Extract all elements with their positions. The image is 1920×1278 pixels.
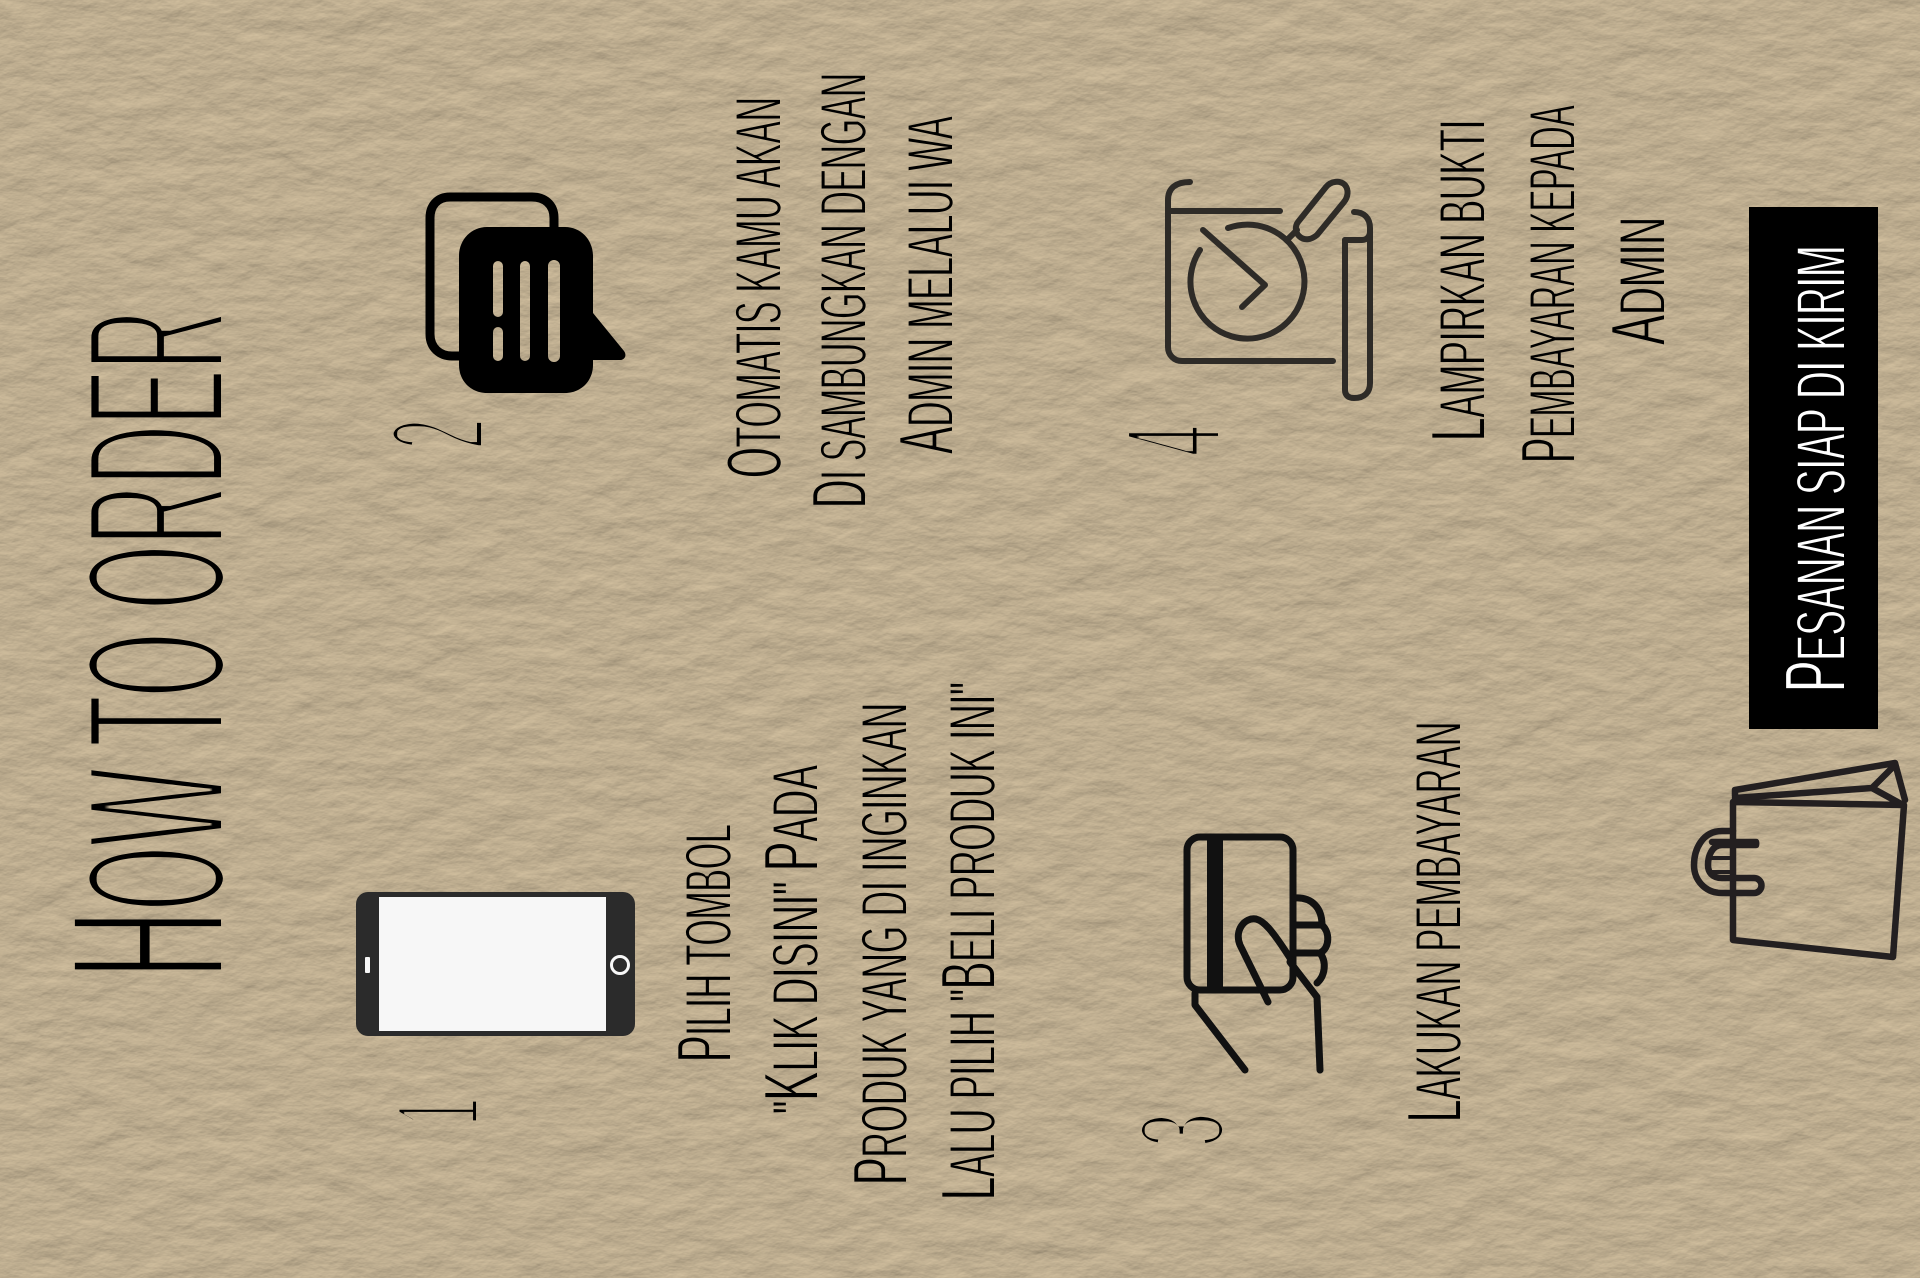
step 1 text	[660, 682, 1012, 1200]
step 2 text: ADMIN MELALUI WA	[882, 116, 970, 454]
step 4 text	[1414, 105, 1682, 463]
panel: step 4	[1097, 105, 1682, 463]
step 3 text: LAKUKAN PEMBAYARAN	[1390, 722, 1478, 1122]
step 1 text: PRODUK YANG DI INGINKAN	[836, 703, 924, 1185]
icon: chat bubbles	[430, 197, 625, 393]
step 2 text	[710, 73, 970, 508]
icon: smartphone	[356, 892, 635, 1036]
step 2 text: OTOMATIS KAMU AKAN	[710, 97, 798, 478]
panel: step 3	[1114, 722, 1478, 1147]
panel: order ready callout	[1694, 207, 1905, 957]
step number 4: 4	[1097, 425, 1251, 456]
step 1 text: LALU PILIH "BELI PRODUK INI"	[924, 682, 1012, 1200]
step 1 text: PILIH TOMBOL	[660, 824, 748, 1062]
step number 1: 1	[371, 1098, 505, 1125]
step number 2: 2	[364, 419, 513, 449]
icon: shopping bag	[1694, 763, 1905, 957]
callout box	[1749, 207, 1878, 729]
step 1 text: "KLIK DISINI" PADA	[747, 765, 835, 1114]
step 2 text: DI SAMBUNGKAN DENGAN	[795, 73, 883, 508]
step number 3: 3	[1114, 1113, 1250, 1147]
icon: payment proof document	[1168, 182, 1370, 398]
panel: step 2	[364, 73, 970, 508]
step 4 text: PEMBAYARAN KEPADA	[1504, 105, 1592, 463]
callout text: PESANAN SIAP DI KIRIM	[1767, 245, 1864, 692]
step 4 text: LAMPIRKAN BUKTI	[1414, 120, 1502, 441]
icon: hand holding card	[1187, 837, 1328, 1070]
title: HOW TO ORDER	[23, 310, 273, 978]
step 4 text: ADMIN	[1594, 217, 1682, 345]
panel: step 1	[356, 682, 1012, 1200]
